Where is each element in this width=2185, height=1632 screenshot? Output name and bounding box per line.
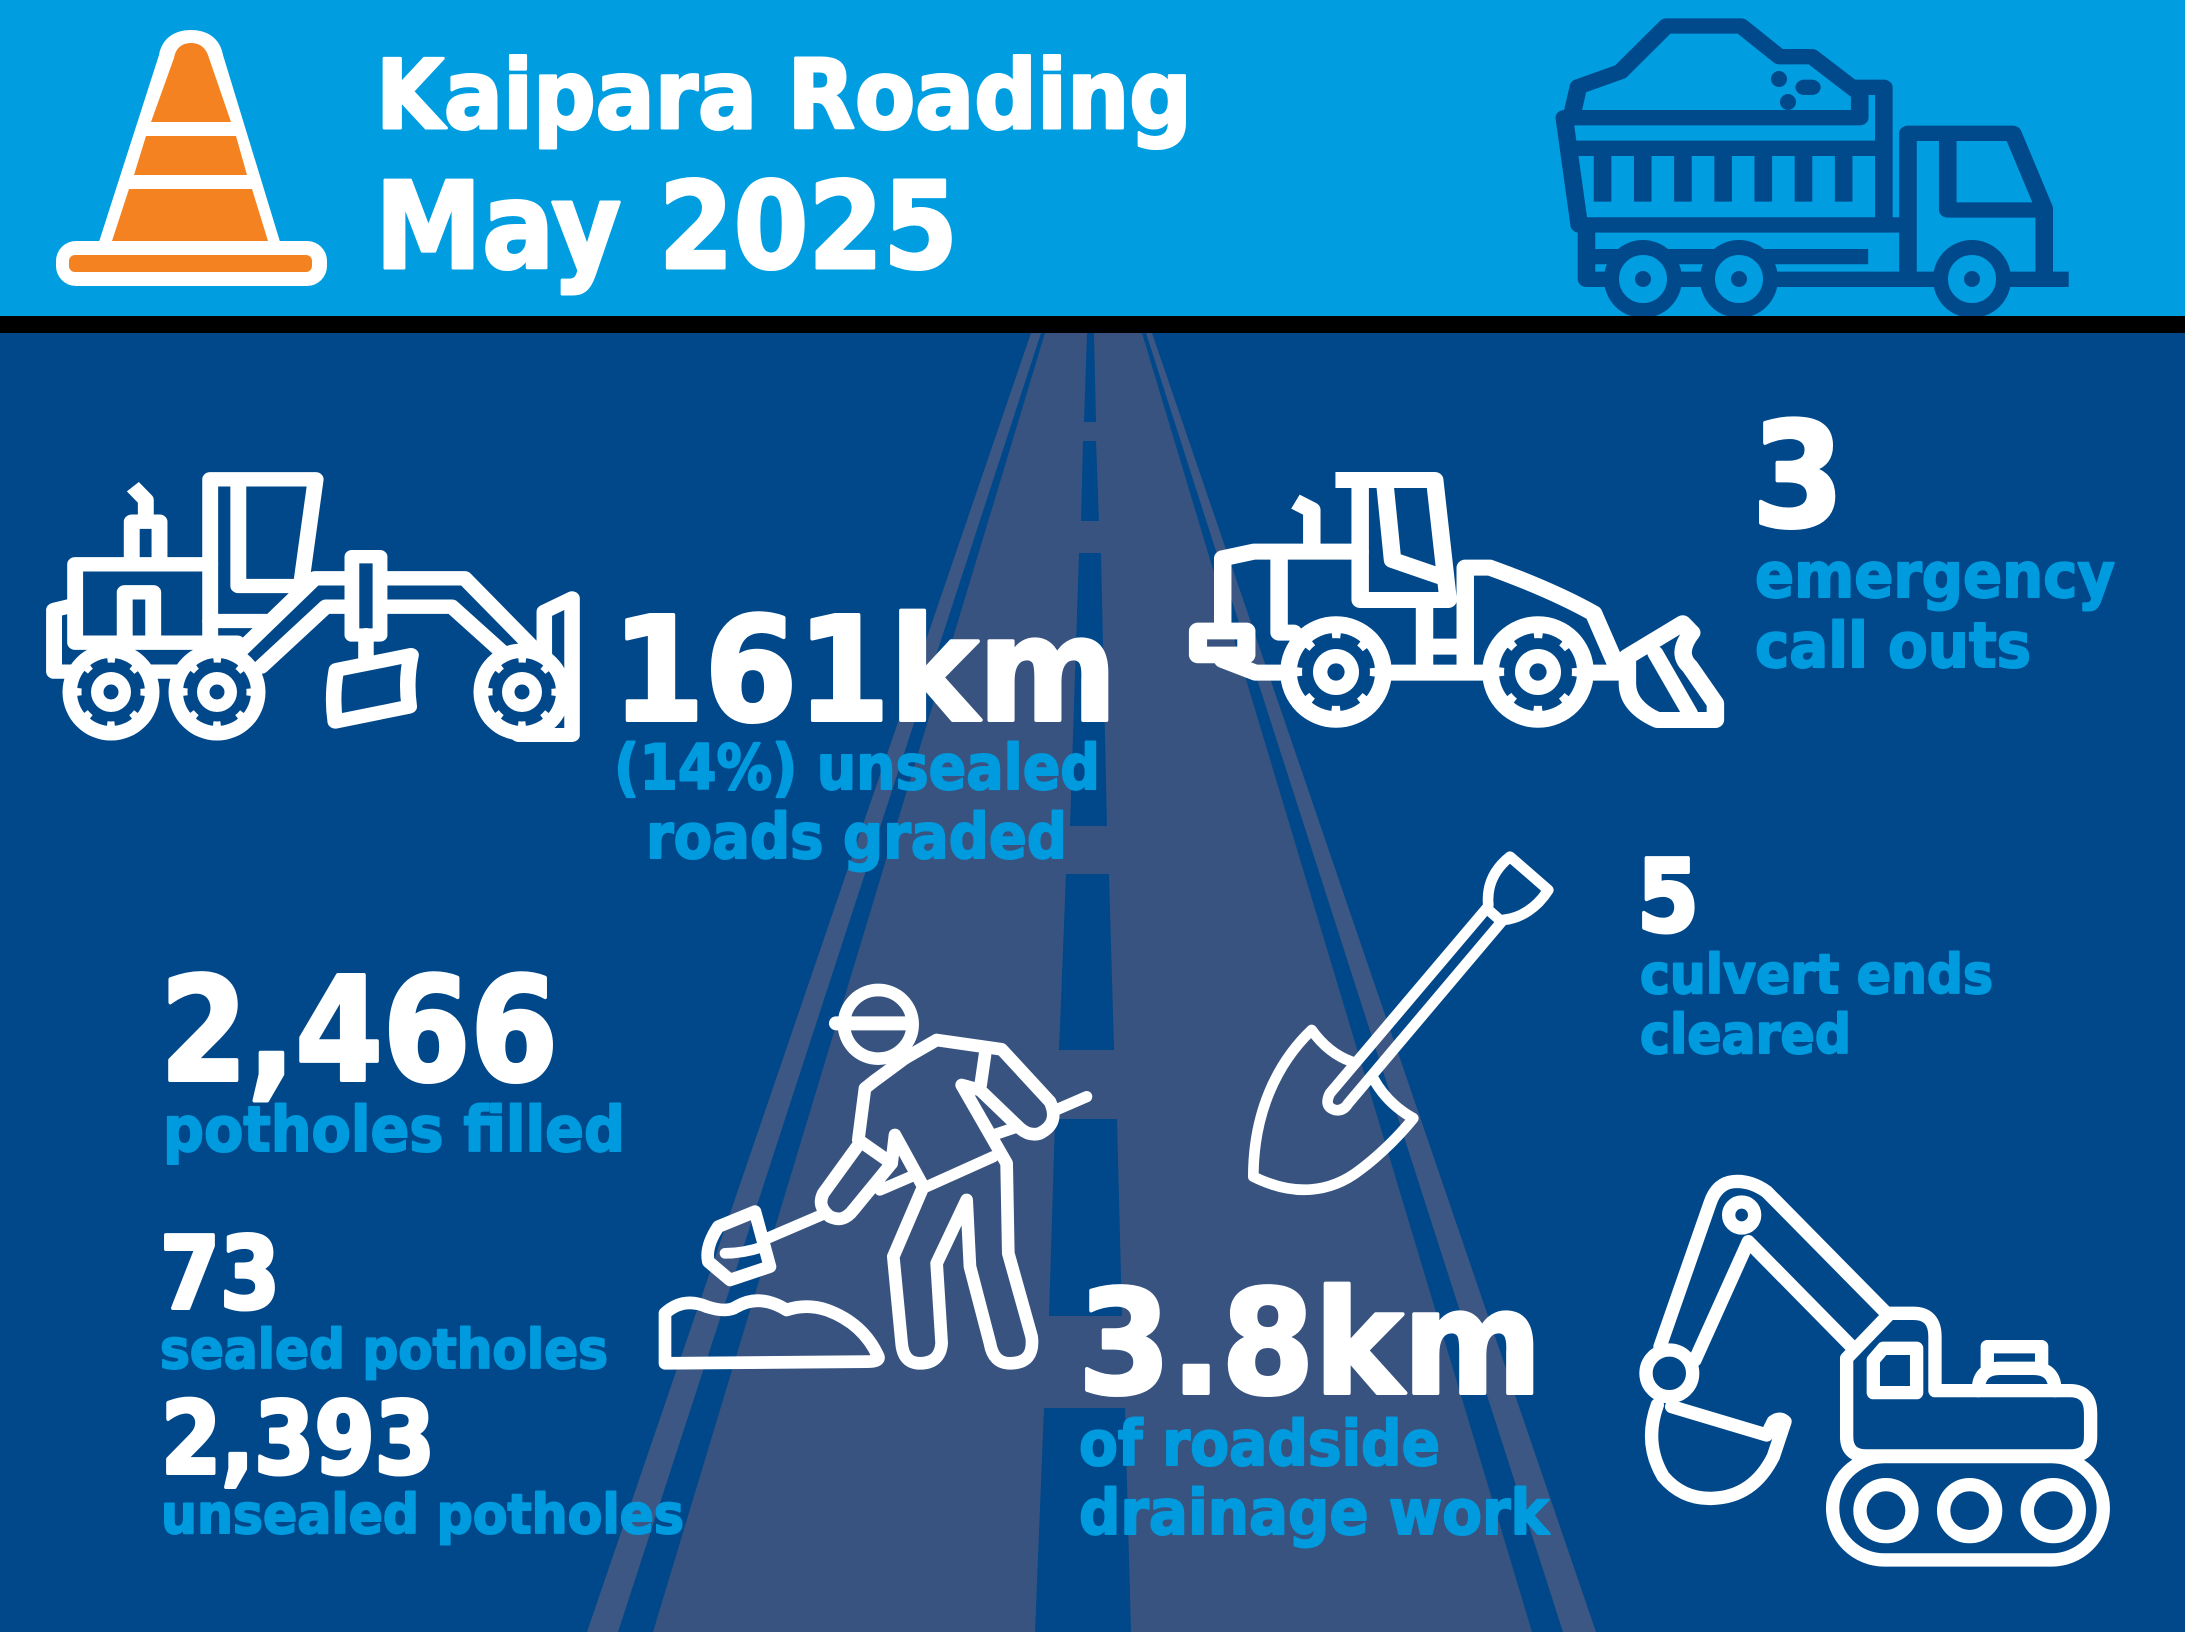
stat: 2,466 potholes filled xyxy=(160,946,625,1166)
value: 73 xyxy=(160,1215,280,1332)
title: Kaipara Roading xyxy=(376,41,1192,151)
road right edge strip xyxy=(1146,333,1596,1632)
stat: 3 emergency call outs xyxy=(1752,392,2115,682)
description line 1: emergency xyxy=(1755,539,2115,612)
description line 1: culvert ends xyxy=(1640,943,1993,1006)
description line 1: of roadside xyxy=(1079,1407,1440,1480)
panel: road background xyxy=(0,333,2185,1632)
value: 5 xyxy=(1637,838,1699,955)
value: 3.8km xyxy=(1078,1259,1542,1427)
icon: front loader xyxy=(1198,480,1715,728)
icon: shovel xyxy=(1253,857,1548,1190)
value: 2,466 xyxy=(160,946,558,1114)
icon: excavator xyxy=(1646,1181,2103,1560)
icon: road worker with shovel xyxy=(665,990,1087,1363)
description: sealed potholes xyxy=(160,1318,608,1381)
description line 2: roads graded xyxy=(646,800,1067,873)
stat: 2,393 unsealed potholes xyxy=(161,1380,684,1546)
icon: dump truck xyxy=(1564,26,2069,310)
stat: 73 sealed potholes xyxy=(160,1215,608,1381)
value: 161km xyxy=(612,586,1117,754)
icon: motor grader xyxy=(54,479,572,740)
value: 3 xyxy=(1752,392,1844,561)
stat: 5 culvert ends cleared xyxy=(1637,838,1993,1066)
subtitle: month: May 2025 xyxy=(375,158,958,297)
panel: header xyxy=(0,0,2185,316)
description line 2: cleared xyxy=(1640,1003,1851,1066)
description: potholes filled xyxy=(163,1093,625,1166)
description line 2: drainage work xyxy=(1079,1476,1551,1549)
description line 1: (14%) unsealed xyxy=(614,731,1100,804)
description: unsealed potholes xyxy=(161,1483,684,1546)
icon: traffic cone xyxy=(56,30,327,286)
value: 2,393 xyxy=(161,1380,435,1497)
description line 2: call outs xyxy=(1755,609,2031,682)
stat: 3.8km drainage work xyxy=(1078,1259,1551,1549)
stat: 161km graded xyxy=(612,586,1117,873)
road centre line dashes xyxy=(1035,333,1131,1632)
road surface xyxy=(653,333,1532,1632)
road left edge strip xyxy=(587,333,1041,1632)
